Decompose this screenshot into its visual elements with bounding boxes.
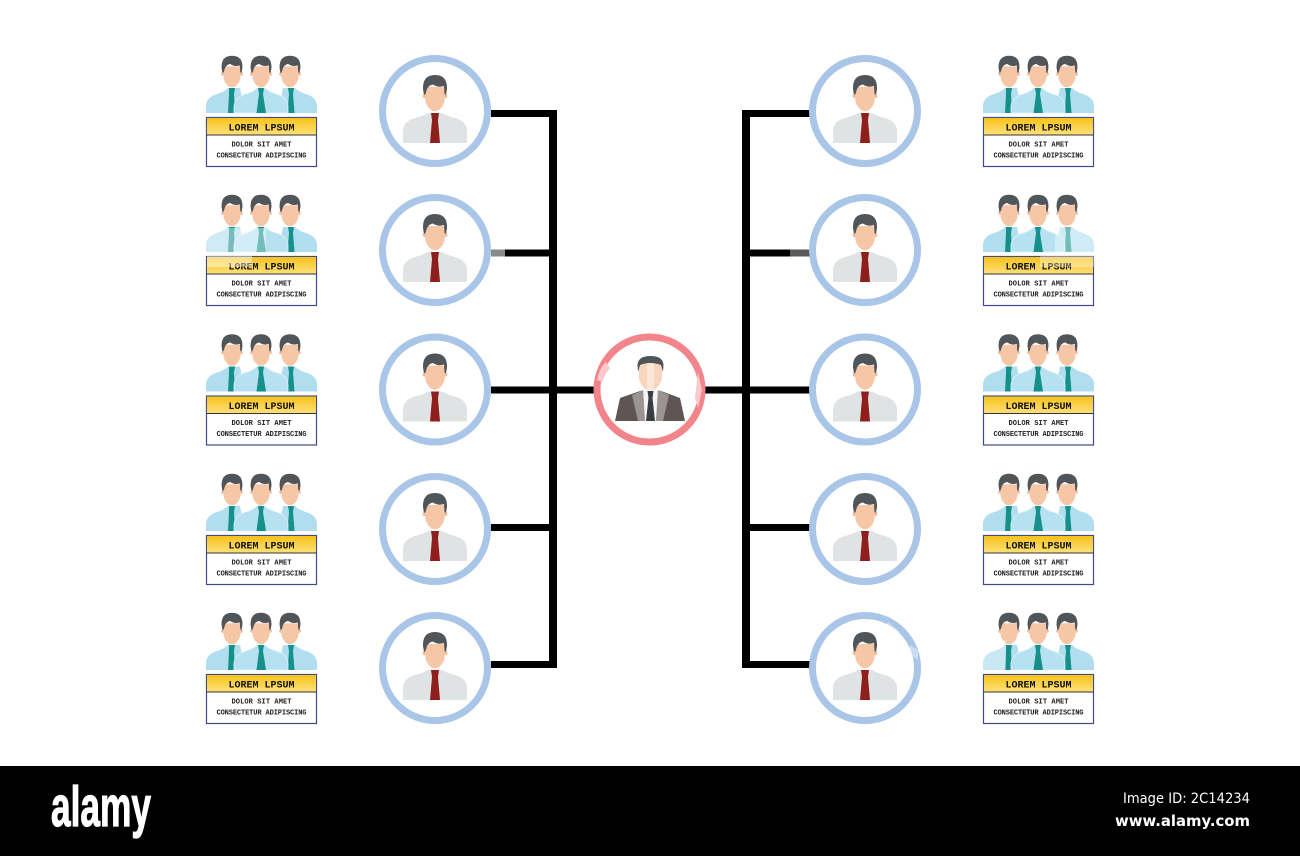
right team 5 xyxy=(983,613,1094,724)
footer bar xyxy=(0,766,1300,856)
left team 1 xyxy=(206,56,317,166)
right team 4: LOREM LPSUM xyxy=(1005,542,1072,552)
left team 5: DOLOR SIT AMET xyxy=(232,698,292,706)
right team 3: LOREM LPSUM xyxy=(1005,402,1072,413)
right team 4: CONSECTETUR ADIPISCING xyxy=(994,570,1084,578)
left manager 4 xyxy=(382,476,488,582)
right team 3 xyxy=(983,334,1094,445)
right team 2: DOLOR SIT AMET xyxy=(1008,280,1068,288)
left team 2: DOLOR SIT AMET xyxy=(232,280,292,288)
right manager 3 xyxy=(812,337,918,442)
right team 4 xyxy=(983,474,1094,584)
left manager 2 xyxy=(382,198,488,302)
left team 2: CONSECTETUR ADIPISCING xyxy=(216,292,306,300)
left team 3: LOREM LPSUM xyxy=(228,402,295,413)
right team 3: CONSECTETUR ADIPISCING xyxy=(994,431,1084,439)
left team 3: DOLOR SIT AMET xyxy=(232,420,292,428)
website: www.alamy.com xyxy=(1115,812,1250,830)
left team 2 xyxy=(206,195,317,306)
left team 4: CONSECTETUR ADIPISCING xyxy=(216,570,306,578)
right team 2 xyxy=(983,195,1094,306)
right team 5: DOLOR SIT AMET xyxy=(1008,698,1068,706)
right team 1: CONSECTETUR ADIPISCING xyxy=(994,152,1084,160)
left team 1: DOLOR SIT AMET xyxy=(232,142,292,150)
right team 1 xyxy=(983,56,1094,166)
right team 3: DOLOR SIT AMET xyxy=(1008,420,1068,428)
left manager 5 xyxy=(382,616,488,720)
left team 5 xyxy=(206,613,317,724)
right team 4: DOLOR SIT AMET xyxy=(1008,560,1068,568)
icon: manager in suit xyxy=(615,356,685,421)
right manager 2 xyxy=(812,198,918,302)
image id: Image ID: 2C14234 xyxy=(1123,791,1250,807)
left team 4 xyxy=(206,474,317,584)
left team 5: LOREM LPSUM xyxy=(228,680,295,692)
left team 3: CONSECTETUR ADIPISCING xyxy=(216,431,306,439)
left team 1: CONSECTETUR ADIPISCING xyxy=(216,152,306,160)
left manager 1 xyxy=(382,58,488,164)
right manager 1 xyxy=(812,58,918,164)
right team 5: LOREM LPSUM xyxy=(1005,680,1072,692)
central manager node xyxy=(597,337,702,442)
connector lines xyxy=(491,110,810,668)
left manager 3 xyxy=(382,337,488,442)
right manager 5 xyxy=(812,616,918,720)
right team 1: LOREM LPSUM xyxy=(1005,124,1072,134)
right team 2: LOREM LPSUM xyxy=(1005,262,1072,274)
right manager 4 xyxy=(812,476,918,582)
right team 1: DOLOR SIT AMET xyxy=(1008,142,1068,150)
left team 5: CONSECTETUR ADIPISCING xyxy=(216,710,306,718)
left team 4: DOLOR SIT AMET xyxy=(232,560,292,568)
right team 2: CONSECTETUR ADIPISCING xyxy=(994,292,1084,300)
left team 4: LOREM LPSUM xyxy=(228,542,295,552)
left team 2: LOREM LPSUM xyxy=(228,262,295,274)
left team 3 xyxy=(206,334,317,445)
left team 1: LOREM LPSUM xyxy=(228,124,295,134)
right team 5: CONSECTETUR ADIPISCING xyxy=(994,710,1084,718)
alamy logo: alamy xyxy=(51,775,151,839)
